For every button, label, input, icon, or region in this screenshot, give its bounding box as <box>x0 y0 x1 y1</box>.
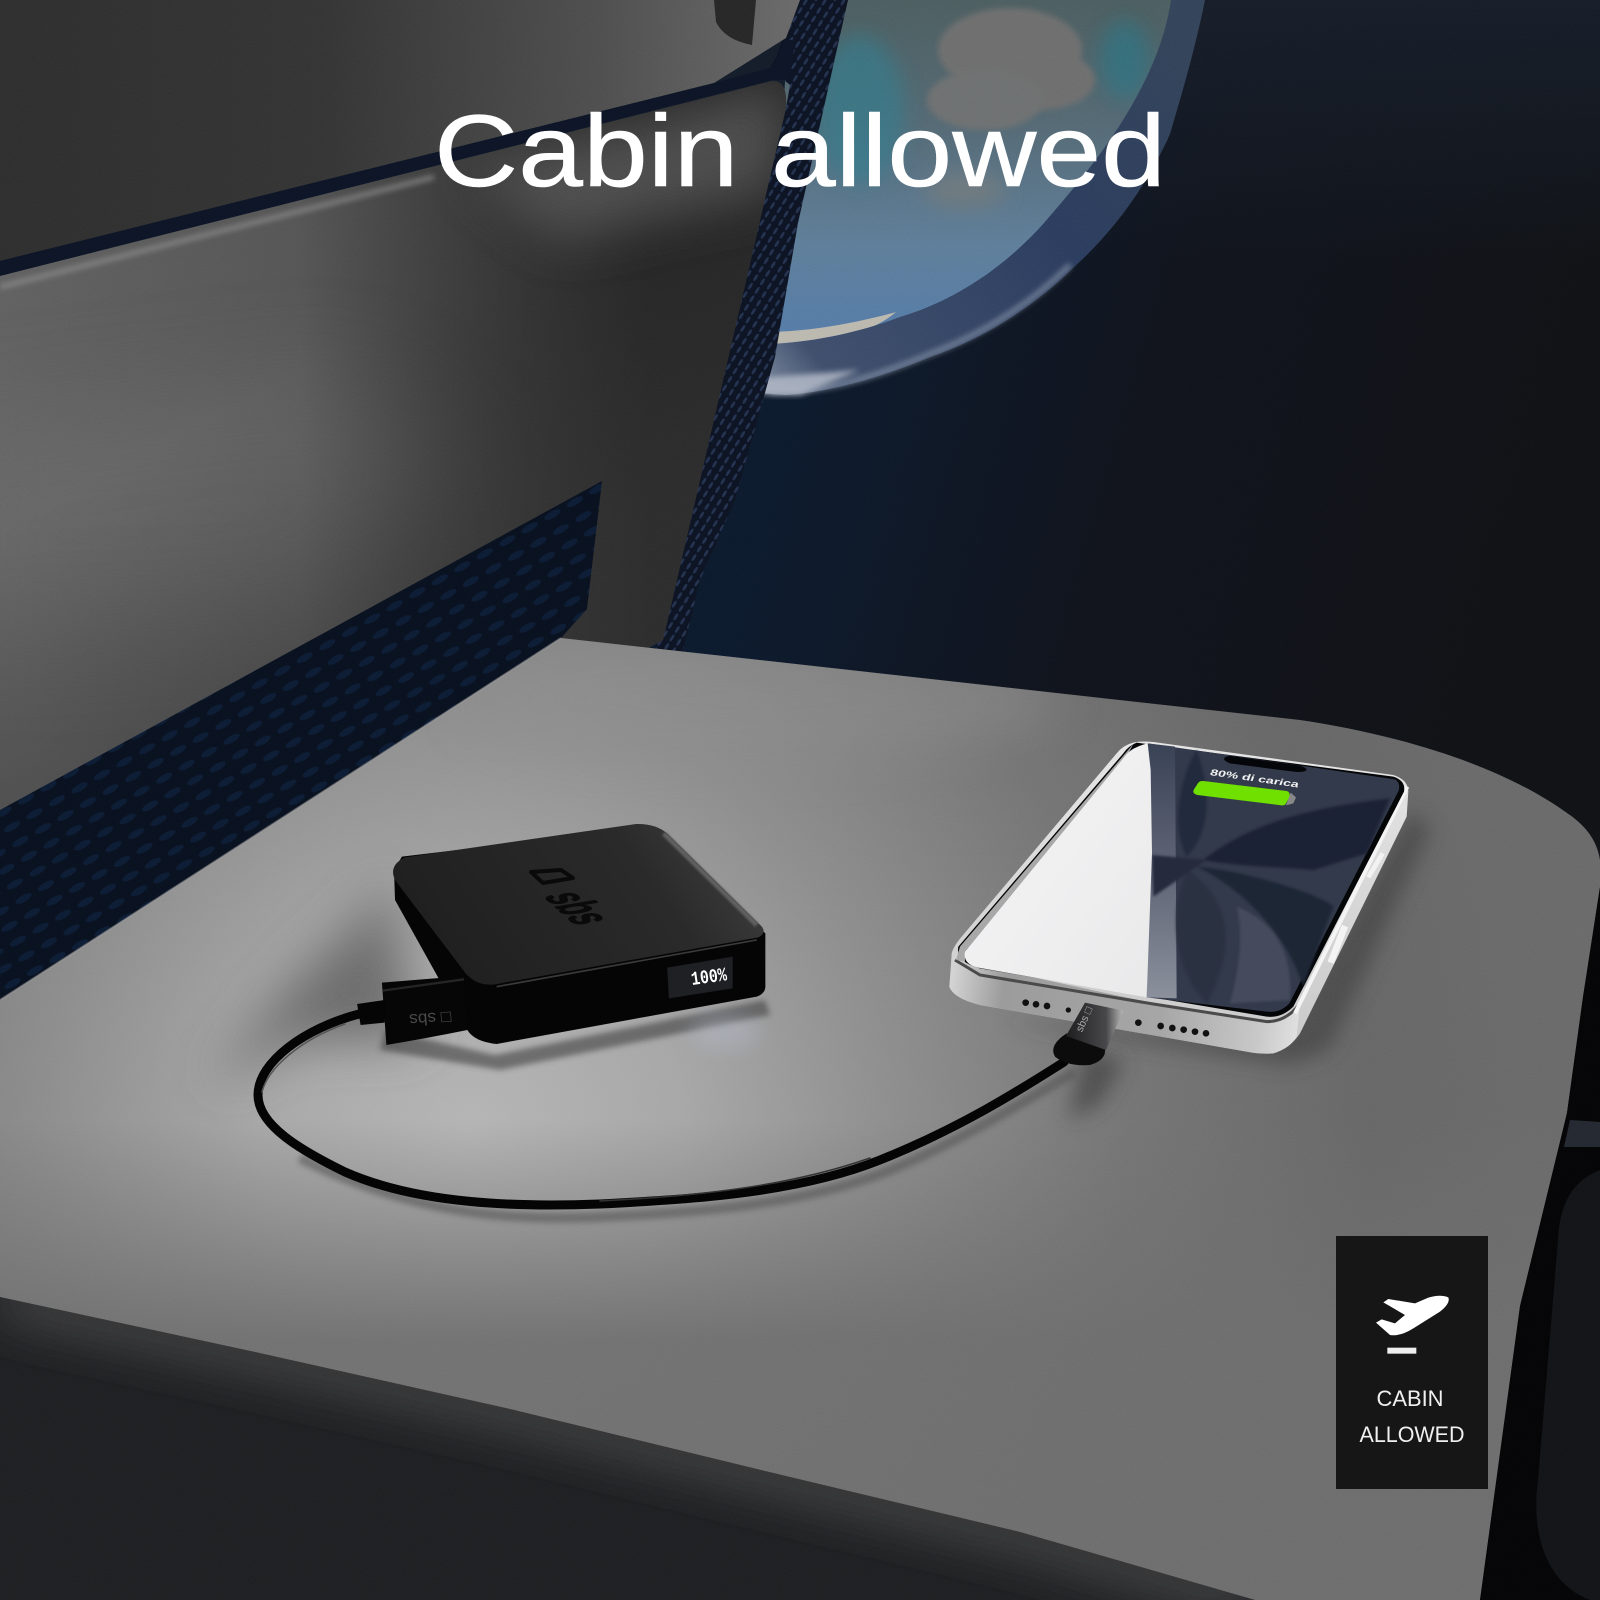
heading: Cabin allowed <box>434 94 1166 208</box>
charging cable <box>258 1014 1064 1205</box>
power bank <box>357 824 765 1045</box>
badge label: CABIN <box>1376 1386 1444 1411</box>
cable shadow <box>300 1072 1075 1218</box>
wallpaper petals <box>1152 750 1390 1003</box>
white screen reflection <box>965 743 1152 997</box>
wallpaper strip <box>1147 743 1177 998</box>
wallpaper <box>1147 743 1399 1012</box>
right edge rim <box>1295 787 1407 1013</box>
usb-c plug collar <box>1053 1033 1105 1065</box>
bezel reflection left <box>956 744 1133 962</box>
seat back upper panel <box>0 0 800 261</box>
bank logo: sbs <box>530 888 626 928</box>
usb plug <box>382 976 467 1045</box>
plug logo: sbs □ <box>1074 1005 1096 1034</box>
airplane window <box>755 0 1205 395</box>
speaker and mic holes <box>1022 999 1209 1037</box>
screen bezel <box>958 743 1404 1017</box>
seat back lower panel <box>0 81 786 810</box>
seat edge fabric strip <box>655 0 848 655</box>
plug neck <box>357 1000 385 1025</box>
seat handle <box>714 0 756 45</box>
seam highlight <box>0 177 434 287</box>
bank display <box>667 957 733 998</box>
charge text: 80% di carica <box>1209 767 1302 790</box>
bank front rim light <box>497 940 757 987</box>
seam between panels <box>0 40 795 276</box>
seat pocket mesh <box>0 481 602 1000</box>
power bank shadow <box>210 885 420 1085</box>
bank logo <box>530 870 626 928</box>
tray table front edge <box>0 1297 1255 1600</box>
battery tip <box>1286 793 1296 805</box>
badge label second line: ALLOWED <box>1360 1422 1464 1447</box>
usb-c plug sleeve <box>1066 1003 1123 1050</box>
plug logo: □ sbs <box>409 1008 452 1029</box>
icon: airplane taking off <box>1376 1296 1449 1354</box>
battery <box>1193 781 1290 805</box>
dark gap right of tray <box>1480 887 1600 1600</box>
bank contact shadow <box>380 1000 770 1070</box>
bank top face <box>393 824 764 985</box>
badge: cabin allowed <box>1336 1236 1488 1489</box>
bank body <box>394 827 765 1044</box>
plug shadow <box>1068 1050 1125 1120</box>
smartphone <box>949 741 1408 1065</box>
screen glow on table <box>691 1016 759 1048</box>
phone bottom edge <box>949 960 1300 1054</box>
bank edge highlight <box>664 833 757 925</box>
frame bevel <box>955 960 1300 1022</box>
notch <box>1224 756 1307 772</box>
display reading: 100% <box>690 965 728 991</box>
phone shadow <box>1058 813 1432 1070</box>
tray table surface <box>0 638 1600 1600</box>
side buttons <box>1368 853 1383 877</box>
phone body <box>949 741 1408 1054</box>
plug highlight <box>383 979 464 991</box>
